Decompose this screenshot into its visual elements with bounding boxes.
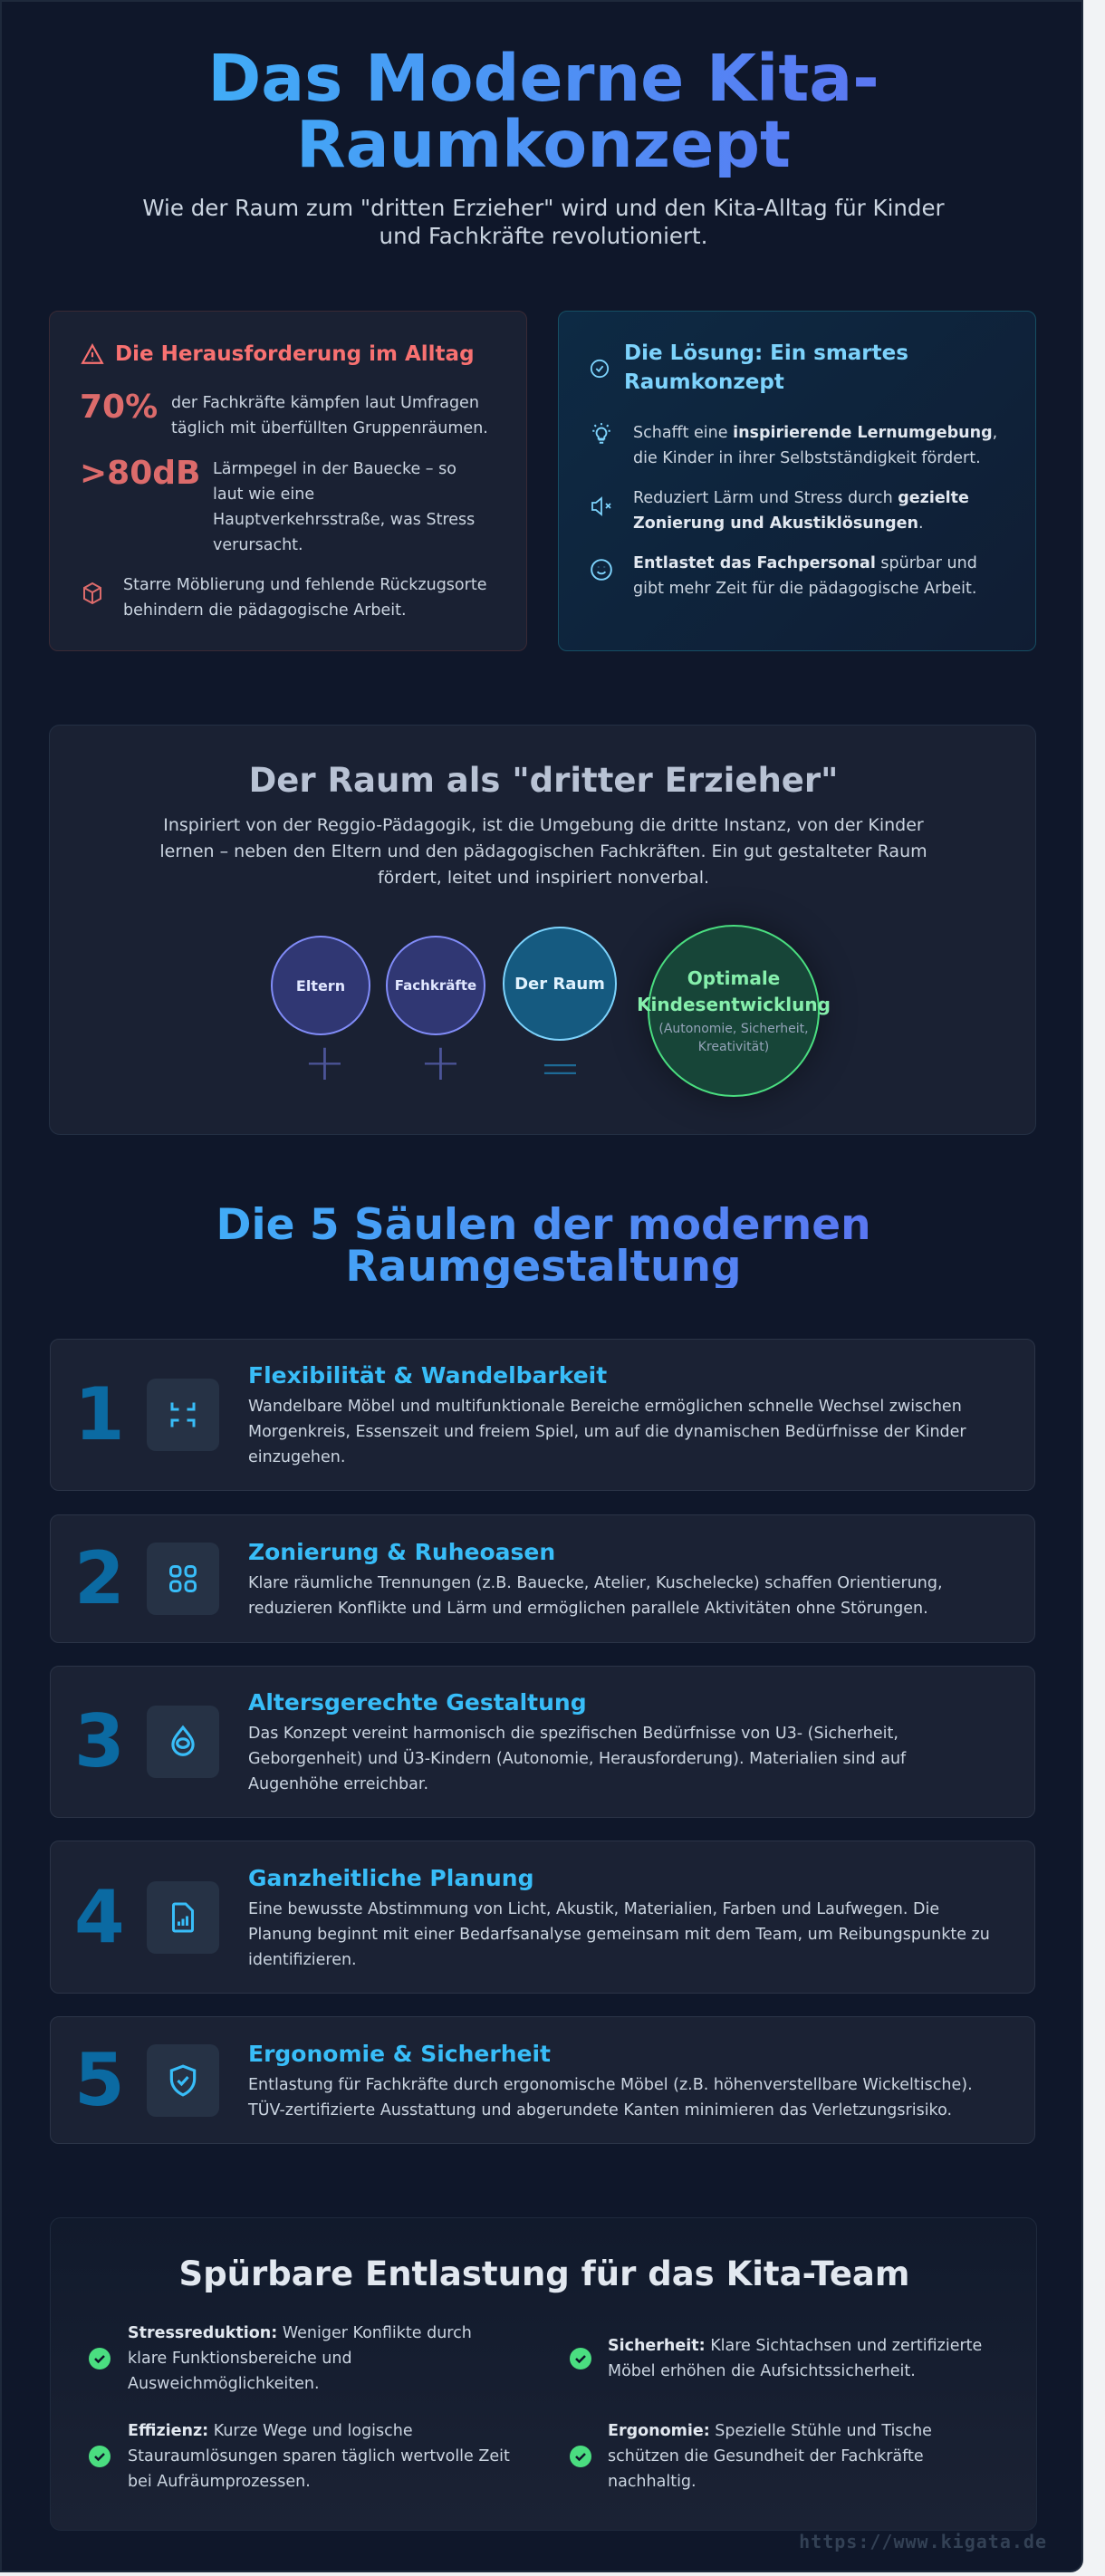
circle: Fachkräfte: [386, 936, 485, 1035]
circle: Der Raum: Der Raum: [514, 975, 605, 993]
item: staff: [591, 554, 977, 598]
panel: solution: Schafft eine inspirierende Lernumgebung, die Kinder in ihrer Selbstständigkeit fördert.: [633, 424, 997, 467]
pillar 5: 5: [74, 2038, 125, 2121]
stat 70%: [80, 389, 488, 437]
pillar 4: Ganzheitliche Planung: [248, 1864, 533, 1891]
title: Das Moderne Kita-: [207, 41, 879, 116]
circle: optimal development: (Autonomie, Sicherheit,: [658, 1022, 809, 1036]
plus signs: [303, 1033, 581, 1098]
plus signs: +: [303, 1033, 346, 1092]
footer url: https://www.kigata.de: [799, 2531, 1047, 2552]
circle: Fachkräfte: Fachkräfte: [395, 977, 476, 994]
pillar 1: Wandelbare Möbel und multifunktionale Bereiche ermöglichen schnelle Wechsel zwischen Morgenkreis, Essenszeit und freiem Spiel, um auf die dynamischen Bedürfnisse der Kinder einzugehen.: [248, 1398, 966, 1466]
panel: challenge: Lärmpegel in der Bauecke – so laut wie eine Hauptverkehrsstraße, was Stress verursacht.: [213, 460, 475, 554]
circle: optimal development: Kindesentwicklung: [637, 994, 831, 1015]
pillar 5: Entlastung für Fachkräfte durch ergonomische Möbel (z.B. höhenverstellbare Wickeltische). TÜV-zertifizierte Ausstattung und abgerundete Kanten minimieren das Verletzungsrisiko.: [248, 2076, 973, 2119]
panel: solution: Reduziert Lärm und Stress durch gezielte Zonierung und Akustiklösungen.: [633, 489, 969, 533]
item: furniture: [83, 576, 486, 620]
title: [2, 45, 1085, 178]
panel: challenge: >80dB: [80, 455, 200, 492]
pillar 4: Eine bewusste Abstimmung von Licht, Akustik, Materialien, Farben und Laufwegen. Die Planung beginnt mit einer Bedarfsanalyse gemeinsam mit dem Team, um Reibungspunkte zu identifizieren.: [248, 1900, 990, 1969]
subtitle: Wie der Raum zum "dritten Erzieher" wird und den Kita-Alltag für Kinder und Fachkräfte revolutioniert.: [142, 195, 945, 249]
circle: Eltern: [271, 936, 370, 1035]
pillar 3: Das Konzept vereint harmonisch die spezifischen Bedürfnisse von U3- (Sicherheit, Geborgenheit) und Ü3-Kindern (Autonomie, Herausforderung). Materialien sind auf Augenhöhe erreichbar.: [248, 1725, 906, 1793]
panel: challenge: [49, 311, 527, 651]
panel: challenge: der Fachkräfte kämpfen laut Umfragen täglich mit überfüllten Gruppenräumen.: [171, 394, 488, 437]
circle: Der Raum: [503, 927, 617, 1041]
icon: zones: [147, 1543, 219, 1615]
heading: challenge: Die Herausforderung im Alltag: [115, 342, 475, 366]
pillar 2: Zonierung & Ruheoasen: [248, 1539, 555, 1565]
pillar 3: Altersgerechte Gestaltung: [248, 1689, 587, 1716]
pillar 1: 1: [74, 1372, 125, 1456]
item: safety: Sicherheit: Klare Sichtachsen und zertifizierte Möbel erhöhen die Aufsichtssicherheit.: [608, 2337, 982, 2380]
item: efficiency: Effizienz: Kurze Wege und logische Stauraumlösungen sparen täglich wertvolle Zeit bei Aufräumprozessen.: [128, 2422, 510, 2491]
text: reggio: Inspiriert von der Reggio-Pädagogik, ist die Umgebung die dritte Instanz, von der Kinder lernen – neben den Eltern und den pädagogischen Fachkräften. Ein gut gestalteter Raum fördert, leitet und inspiriert nonverbal.: [159, 815, 927, 888]
heading: 5 pillars: [2, 1205, 1085, 1288]
pillar 2: [50, 1514, 1035, 1643]
pillar 2: 2: [74, 1536, 125, 1620]
panel: challenge: 70%: [80, 389, 158, 426]
diagram: equation: [271, 922, 831, 1100]
circle: optimal development: Optimale: [687, 967, 780, 989]
item: noise: [591, 489, 969, 533]
item: ergonomics: Ergonomie: Spezielle Stühle und Tische schützen die Gesundheit der Fachkräfte nachhaltig.: [608, 2422, 932, 2491]
icon: drop: [147, 1706, 219, 1778]
title: Raumkonzept: [296, 107, 791, 182]
pillar 2: Klare räumliche Trennungen (z.B. Bauecke, Atelier, Kuschelecke) schaffen Orientierung, reduzieren Konflikte und Lärm und ermöglichen parallele Aktivitäten ohne Störungen.: [248, 1574, 943, 1618]
plus signs: +: [419, 1033, 462, 1092]
panel: relief for team: [50, 2217, 1037, 2531]
pillar 3: [50, 1666, 1035, 1818]
circle: Eltern: Eltern: [296, 976, 345, 995]
heading: third educator: Der Raum als "dritter Erzieher": [249, 761, 838, 800]
stat 80dB: [80, 455, 475, 554]
plus signs: =: [539, 1039, 581, 1098]
pillar 5: Ergonomie & Sicherheit: [248, 2040, 551, 2067]
pillar 1: [50, 1339, 1035, 1491]
heading: 5 pillars: Raumgestaltung: [345, 1242, 742, 1292]
icon: shield: [147, 2043, 219, 2116]
pillar 3: 3: [74, 1699, 125, 1783]
heading: relief: Spürbare Entlastung für das Kita-Team: [179, 2254, 909, 2293]
pillar 1: Flexibilität & Wandelbarkeit: [248, 1362, 607, 1389]
icon: document chart: [147, 1880, 219, 1953]
icon: expand: [147, 1379, 219, 1451]
panel: challenge: Starre Möblierung und fehlende Rückzugsorte behindern die pädagogische Arbeit.: [123, 576, 486, 620]
panel: solution: Entlastet das Fachpersonal spürbar und gibt mehr Zeit für die pädagogische Arbeit.: [633, 554, 977, 598]
pillar 4: [50, 1841, 1035, 1994]
panel: solution: [558, 311, 1036, 651]
item: learning: [592, 423, 997, 467]
heading: 5 pillars: Die 5 Säulen der modernen: [216, 1200, 871, 1250]
circle: optimal development: Kreativität): [698, 1040, 769, 1054]
heading: solution: Die Lösung: Ein smartes Raumkonzept: [624, 341, 908, 394]
panel: third educator: [49, 725, 1036, 1135]
item: stress: Stressreduktion: Weniger Konflikte durch klare Funktionsbereiche und Ausweichmöglichkeiten.: [128, 2324, 472, 2393]
pillar 4: 4: [74, 1875, 125, 1958]
pillar 5: [50, 2016, 1035, 2144]
circle: optimal development: [648, 925, 820, 1097]
